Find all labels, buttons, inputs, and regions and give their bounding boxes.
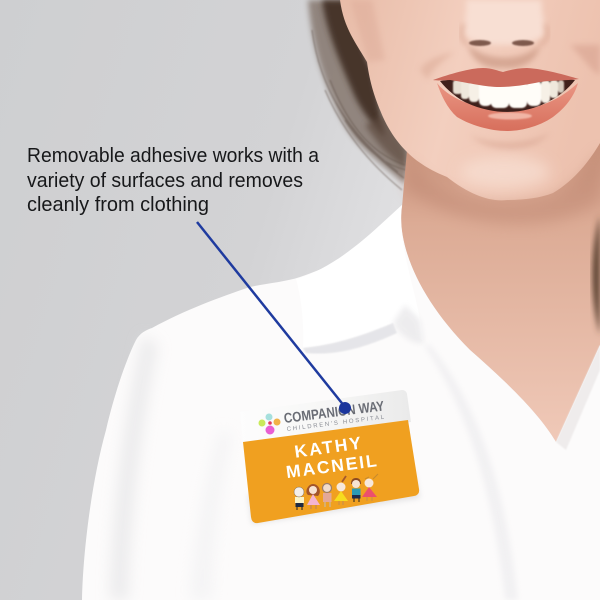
callout line 3: cleanly from clothing [27,194,209,216]
face [340,0,600,225]
chin highlight [460,156,550,188]
white shirt [82,205,600,600]
right collar edge [556,345,600,450]
callout line 1: Removable adhesive works with a [27,145,320,167]
neck and chest skin [401,130,600,442]
collar [296,205,423,348]
callout line 2: variety of surfaces and removes [27,170,303,192]
company subtitle: CHILDREN'S HOSPITAL [286,415,385,433]
name badge [240,390,420,524]
smile crease left [420,52,455,80]
collar shadow [303,323,397,354]
placket shadow [424,345,518,600]
hair: left side [308,0,412,190]
lower lip [437,83,578,131]
nose bridge and tip [465,0,544,45]
badge drop shadow [248,470,420,524]
badge orange panel [243,420,419,523]
child 6 [362,474,378,501]
nostril left [469,40,491,46]
torso fold near arm [190,430,232,600]
badge header panel [240,390,411,444]
mouth interior [440,77,575,113]
name line 1: KATHY [293,432,364,462]
jaw shadow on neck [405,148,600,225]
hair: right side wisps [581,215,600,495]
cartoon children [294,474,378,510]
smile crease right [570,45,600,75]
sleeve seam shadow [110,335,158,600]
callout arrow with dot [197,222,351,414]
cheek shadow left [350,0,385,62]
logo icon [258,414,280,434]
shadow beneath nose [468,44,540,68]
collar fold [393,305,424,343]
nose wing shadow left [461,24,468,45]
nose wing shadow right [540,24,548,45]
child 5 [351,478,361,502]
child 4 [334,476,348,505]
nostril right [512,40,534,46]
name line 2: MACNEIL [285,450,380,482]
child 2 [306,484,320,509]
child 1 [294,487,304,510]
upper lip [433,68,579,87]
callout text [27,145,320,216]
company name: COMPANION WAY [283,397,386,426]
teeth [453,80,564,108]
lower lip highlight [488,112,532,120]
child 3 [322,484,332,507]
chin shadow under lip [470,132,550,150]
